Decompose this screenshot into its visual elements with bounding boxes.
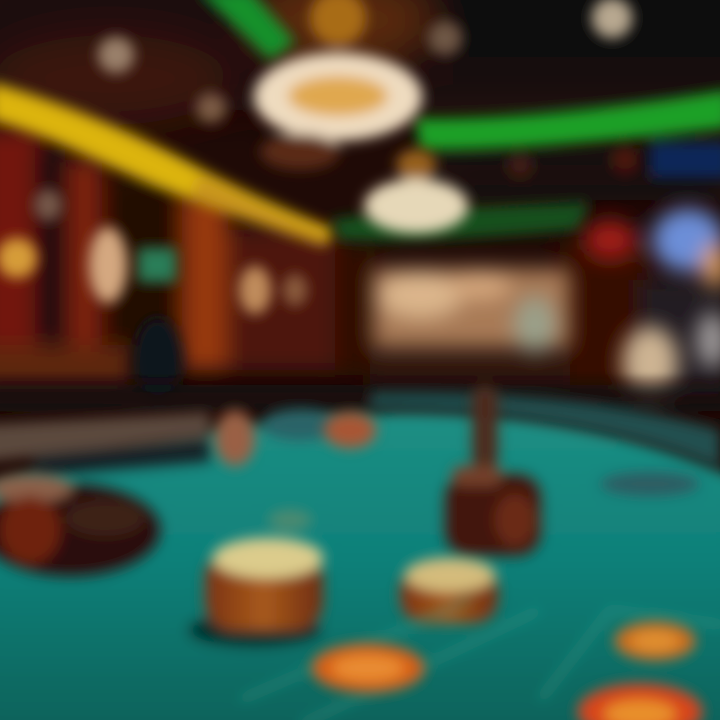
- back bar glow: [372, 268, 570, 353]
- front chip stack: [189, 510, 323, 646]
- right side lights and slot machines: [584, 208, 720, 398]
- centre chip stack with figure: [445, 385, 541, 556]
- wall lights: [0, 189, 307, 314]
- seated figure silhouette: [134, 318, 182, 402]
- small chips in the distance: [215, 410, 376, 466]
- chandelier: [254, 0, 422, 170]
- orange table marker right: [615, 622, 695, 660]
- distant table marker: [600, 472, 700, 496]
- orange table marker centre: [312, 644, 424, 692]
- betting grid lines: [240, 600, 720, 720]
- yellow ceiling band: [0, 82, 335, 246]
- table rail: [0, 392, 720, 476]
- orange table marker bottom: [578, 684, 702, 720]
- left chip stack: [0, 474, 160, 576]
- green ceiling bands: [198, 0, 720, 241]
- ceiling: [0, 0, 720, 200]
- ceiling spot lights: [98, 0, 639, 178]
- lower lamp: [364, 149, 468, 233]
- right chip stack: [400, 558, 498, 623]
- wall panels: [0, 130, 720, 400]
- dark table edge: [0, 385, 720, 411]
- green felt table: [0, 412, 720, 720]
